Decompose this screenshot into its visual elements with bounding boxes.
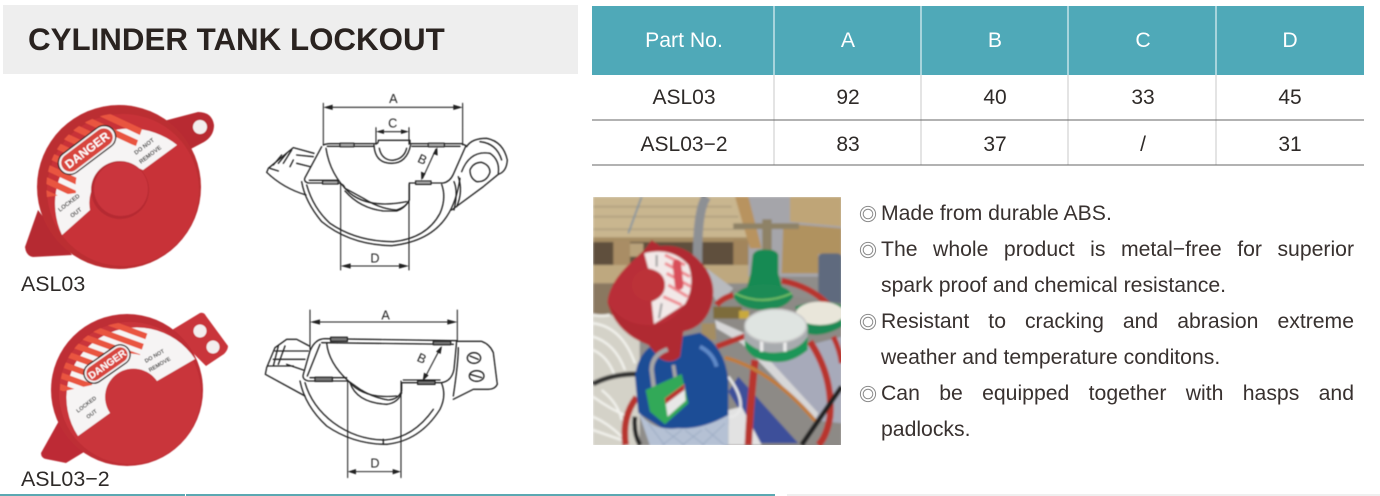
danger tag [80,341,134,387]
specification table: 92 [836,86,860,109]
regulator [733,223,799,229]
metal sheet and ground [710,296,841,445]
specification table: D [1282,29,1298,52]
specification table: A [841,29,856,52]
title banner [3,5,578,74]
cylinder [635,333,728,431]
feature list: The whole product is metal−free for superior [881,238,1354,261]
technical drawing: ASL03-2: A [381,309,390,323]
technical drawing: ASL03 [267,92,507,270]
product photo: ASL03-2: DO NOT [144,348,166,365]
technical drawing: ASL03-2: B [415,351,428,367]
cables [593,315,640,446]
danger tag: DANGER [87,348,129,382]
technical drawing: ASL03: B [416,152,429,168]
feature list: weather and temperature conditons. [881,346,1220,369]
feature list: Can be equipped together with hasps and [881,382,1354,405]
feature list: spark proof and chemical resistance. [881,274,1226,297]
feature list: Resistant to cracking and abrasion extreme [881,310,1354,333]
technical drawing: ASL03: D [370,251,380,265]
product photo: ASL03: REMOVE [139,145,163,166]
danger tag [54,121,120,179]
feature list [881,202,1354,441]
feature list: Made from durable ABS. [881,202,1112,225]
feature list: padlocks. [881,418,971,441]
in-use photo: cylinder with lockout fitted [593,197,844,447]
specification table: Part No. [645,29,723,52]
specification table: B [988,29,1002,52]
technical drawing: ASL03-2 [265,309,497,478]
label: ASL03-2: ASL03−2 [21,467,110,491]
gauges [795,302,842,335]
specification table: 31 [1278,133,1302,156]
specification table: 45 [1278,86,1302,109]
product photo: ASL03 [24,104,215,270]
danger tag: DANGER [62,129,112,171]
hoses [717,295,733,305]
product photo: ASL03-2: OUT [86,408,99,421]
padlock [652,349,668,392]
title banner: CYLINDER TANK LOCKOUT [28,22,445,57]
product photo: ASL03: OUT [70,207,84,220]
technical drawing: ASL03: C [388,116,397,130]
specification table: ASL03 [652,86,716,109]
right background [748,197,842,277]
lockout device [608,240,713,361]
product photo: ASL03-2 [40,312,229,467]
background pallets [593,197,750,240]
bullet icons [860,206,876,402]
specification table: ASL03−2 [640,133,728,156]
specification table: 83 [836,133,860,156]
technical drawing: ASL03: A [389,92,398,106]
specification table: 40 [983,86,1007,109]
specification table: 37 [983,133,1007,156]
specification table [592,6,1364,165]
specification table: C [1135,29,1151,52]
product photo: ASL03-2: LOCKED [76,396,98,415]
bottom rule [0,494,1380,496]
technical drawing: ASL03-2: D [370,456,380,470]
product photo: ASL03-2: REMOVE [148,356,172,374]
specification table: / [1140,133,1146,156]
label: ASL03: ASL03 [21,272,85,296]
specification table: 33 [1131,86,1155,109]
product photo: ASL03: LOCKED [58,193,82,214]
product photo: ASL03: DO NOT [134,138,156,157]
